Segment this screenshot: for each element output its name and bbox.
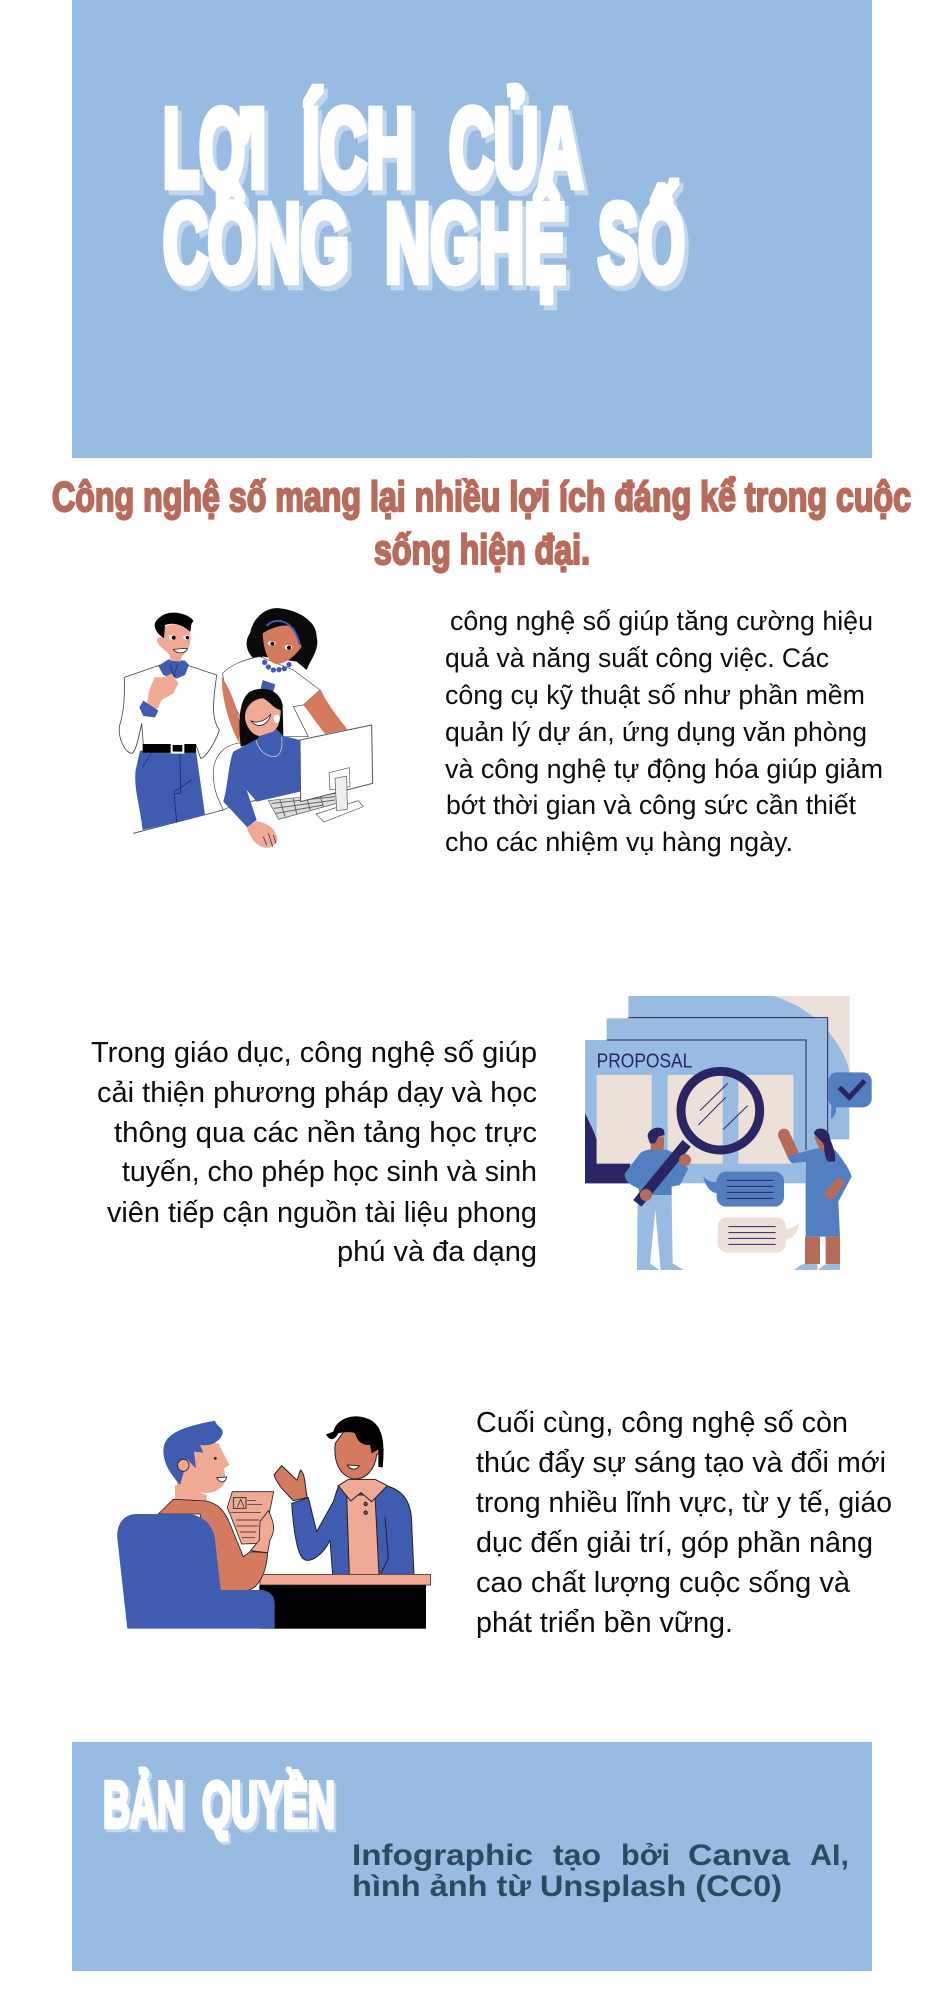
paragraph 1: công nghệ số giúp tăng cường hiệu (450, 606, 873, 636)
copyright text (352, 1839, 849, 1903)
woman at the desk (213, 689, 300, 848)
paragraph 1: công cụ kỹ thuật số như phần mềm (445, 680, 865, 710)
title (163, 87, 685, 305)
stacked sheets: PROPOSAL (597, 1050, 692, 1072)
subtitle: sống hiện đại. (374, 526, 590, 573)
paragraph 3: cao chất lượng cuộc sống và (476, 1567, 851, 1599)
illustration: two men talking at a desk (117, 1416, 431, 1629)
paragraph 3: phát triển bền vững. (476, 1607, 733, 1639)
computer (268, 725, 373, 822)
paragraph 3: dục đến giải trí, góp phần nâng (476, 1527, 873, 1559)
copyright text: tạo (553, 1839, 601, 1872)
paragraph 1: cho các nhiệm vụ hàng ngày. (445, 827, 793, 857)
paragraph 1: và công nghệ tự động hóa giúp giảm (445, 754, 883, 784)
copyright heading: QUYỀN (202, 1768, 335, 1841)
paragraph 2: thông qua các nền tảng học trực (114, 1117, 537, 1149)
title: SỐ (598, 182, 685, 305)
copyright text: Infographic (352, 1839, 533, 1872)
armchair (117, 1514, 275, 1629)
copyright text: hình ảnh từ Unsplash (CC0) (352, 1870, 782, 1903)
copyright text: Canva (688, 1839, 790, 1872)
woman with curly hair (222, 608, 347, 743)
illustration: three colleagues at a computer (119, 608, 373, 848)
speech bubbles (703, 1172, 799, 1253)
paragraph 3: trong nhiều lĩnh vực, từ y tế, giáo (476, 1487, 892, 1519)
panel: title background (72, 0, 872, 458)
speech bubble with check (828, 1072, 872, 1119)
copyright text: bởi (621, 1839, 670, 1872)
man in blue jacket (274, 1416, 414, 1575)
woman presenting (784, 1129, 852, 1270)
paragraph 3 (476, 1407, 892, 1639)
paragraph 2: Trong giáo dục, công nghệ số giúp (91, 1037, 537, 1069)
copyright heading: BẢN (103, 1768, 184, 1841)
subtitle (52, 473, 911, 573)
paragraph 2: tuyến, cho phép học sinh và sinh (122, 1156, 537, 1188)
title: CỦA (449, 87, 583, 210)
paragraph 1 (445, 606, 883, 857)
man with blue hair reading resume (158, 1421, 274, 1591)
title: ÍCH (302, 87, 413, 210)
title: CÔNG (163, 182, 349, 305)
paragraph 1: quản lý dự án, ứng dụng văn phòng (445, 717, 867, 747)
paragraph 3: Cuối cùng, công nghệ số còn (476, 1407, 848, 1439)
desk (259, 1574, 431, 1629)
man in white shirt (119, 613, 219, 830)
stacked sheets (585, 996, 849, 1183)
paragraph 1: quả và năng suất công việc. Các (445, 643, 829, 673)
panel: copyright (72, 1742, 872, 1971)
title: LỢI (163, 87, 266, 210)
man holding magnifier (625, 1128, 691, 1270)
paragraph 3: thúc đẩy sự sáng tạo và đổi mới (476, 1447, 886, 1479)
paragraph 1: bớt thời gian và công sức cần thiết (446, 790, 856, 820)
copyright text: AI, (810, 1839, 849, 1872)
paragraph 2: phú và đa dạng (337, 1236, 537, 1268)
illustration: proposal review (585, 996, 872, 1270)
paragraph 2: cải thiện phương pháp dạy và học (97, 1077, 537, 1109)
copyright heading (103, 1768, 335, 1841)
paragraph 2 (91, 1037, 537, 1268)
paragraph 2: viên tiếp cận nguồn tài liệu phong (107, 1197, 537, 1229)
title: NGHỆ (385, 182, 566, 305)
magnifying glass (681, 1071, 760, 1150)
desk line (133, 791, 300, 833)
